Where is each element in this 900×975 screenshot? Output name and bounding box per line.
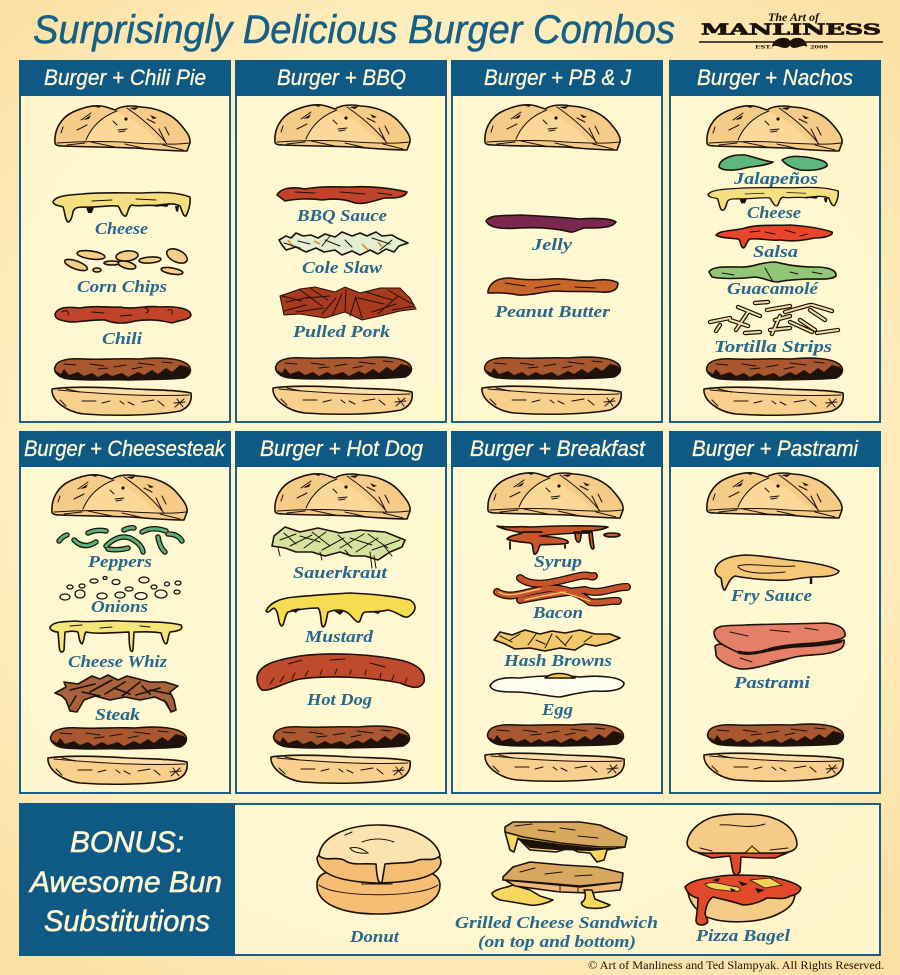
- logo: The Art of Manliness: 2009: [810, 44, 829, 50]
- peppers: [59, 528, 182, 552]
- label: hot dog: Hot Dog: [306, 690, 373, 709]
- bottom bun: [48, 756, 187, 784]
- logo: The Art of Manliness: [699, 10, 883, 50]
- label: chili: Chili: [102, 329, 142, 348]
- logo: The Art of Manliness: The Art of: [768, 10, 820, 24]
- peanut butter: [488, 278, 618, 295]
- label: peanut butter: Peanut Butter: [494, 302, 610, 321]
- top bun: [275, 104, 410, 150]
- copyright: © Art of Manliness and Ted Slampyak. All Rights Reserved.: [588, 960, 884, 972]
- header band: [235, 60, 447, 96]
- tortilla strips: [710, 302, 838, 334]
- top bun: [52, 474, 187, 520]
- label: pastrami: Pastrami: [733, 673, 810, 692]
- heading: Burger + Chili Pie: [44, 65, 206, 90]
- panel: Burger + PB & J: [451, 60, 663, 422]
- heading: Burger + Cheesesteak: [24, 436, 226, 461]
- label: steak: Steak: [95, 705, 141, 724]
- bottom bun: [271, 755, 410, 783]
- egg: [490, 674, 624, 697]
- header band: [669, 431, 881, 467]
- patty: [276, 357, 412, 379]
- chili: [55, 307, 191, 323]
- header band: [451, 431, 663, 467]
- cheese: [53, 192, 190, 222]
- hot dog: [257, 654, 424, 690]
- bottom bun: [482, 386, 621, 414]
- label: fry sauce: Fry Sauce: [730, 586, 813, 605]
- bottom bun: [704, 753, 843, 781]
- heading: Burger + Nachos: [697, 65, 853, 90]
- panel: bonus bun substitutions: [19, 803, 880, 956]
- bbq sauce: [277, 187, 407, 203]
- label: on top and bottom: (on top and bottom): [478, 932, 636, 951]
- label: cheese: Cheese: [95, 219, 148, 238]
- header band: [19, 431, 231, 467]
- label: sauerkraut: Sauerkraut: [293, 563, 388, 582]
- label: egg: Egg: [541, 700, 574, 719]
- panel: Burger + Breakfast: [451, 431, 663, 793]
- label: salsa: Salsa: [753, 242, 799, 261]
- label: cheese: Cheese: [747, 203, 801, 222]
- patty: [55, 358, 191, 380]
- panel: Burger + Chili Pie: [19, 60, 231, 422]
- label: jalapenos: Jalapeños: [733, 169, 818, 188]
- top bun: [485, 104, 620, 150]
- cheese whiz: [50, 621, 182, 652]
- label: syrup: Syrup: [534, 552, 582, 571]
- logo: The Art of Manliness: EST.: [755, 44, 772, 50]
- bottom bun: [704, 387, 843, 415]
- heading: Burger + PB & J: [484, 65, 632, 90]
- label: jelly: Jelly: [531, 235, 573, 254]
- label: guacamole: Guacamolé: [727, 279, 820, 298]
- panel: Burger + Nachos: [669, 60, 881, 422]
- label: bacon: Bacon: [532, 603, 583, 622]
- heading: Burger + Hot Dog: [260, 436, 424, 461]
- label: corn chips: Corn Chips: [77, 277, 167, 296]
- label: peppers: Peppers: [87, 552, 152, 571]
- panel: Burger + Hot Dog: [235, 431, 447, 793]
- pulled pork: [280, 287, 416, 320]
- salsa: [716, 225, 832, 248]
- patty: [485, 357, 621, 379]
- label: donut: Donut: [349, 927, 400, 946]
- bonus heading block: Substitutions: [44, 905, 210, 938]
- label: grilled cheese sandwich: Grilled Cheese Sandwich: [455, 913, 658, 932]
- grilled cheese sandwich: [492, 822, 627, 908]
- jelly: [486, 215, 616, 232]
- label: bbq sauce: BBQ Sauce: [296, 206, 387, 225]
- title: Surprisingly Delicious Burger Combos: [33, 8, 675, 52]
- top bun: [275, 473, 410, 519]
- label: tortilla strips: Tortilla Strips: [714, 337, 832, 356]
- bottom bun: [273, 386, 412, 414]
- patty: [274, 726, 410, 748]
- cheese: [708, 187, 838, 210]
- header band: [451, 60, 663, 96]
- patty: [51, 727, 187, 749]
- bonus heading block: [19, 803, 235, 956]
- top bun: [55, 105, 190, 151]
- label: pizza bagel: Pizza Bagel: [695, 926, 790, 945]
- bonus heading block: Awesome Bun: [28, 866, 222, 899]
- header band: [669, 60, 881, 96]
- sauerkraut: [272, 527, 405, 568]
- heading: Burger + Breakfast: [470, 436, 646, 461]
- bottom bun: [485, 753, 624, 781]
- top bun: [488, 472, 623, 518]
- pastrami: [714, 623, 845, 669]
- logo: The Art of Manliness: MANLINESS: [701, 20, 881, 38]
- syrup: [497, 526, 620, 554]
- cole slaw: [279, 232, 408, 255]
- corn chips: [63, 246, 190, 276]
- fry sauce: [715, 555, 839, 590]
- label: cheese whiz: Cheese Whiz: [68, 652, 167, 671]
- panel: Burger + Pastrami: [669, 431, 881, 793]
- pizza bagel: [685, 814, 801, 925]
- panel: Burger + Cheesesteak: [19, 431, 231, 793]
- label: onions: Onions: [91, 597, 148, 616]
- patty: [708, 724, 844, 746]
- panel: Burger + BBQ: [235, 60, 447, 422]
- heading: Burger + BBQ: [277, 65, 406, 90]
- label: pulled pork: Pulled Pork: [292, 322, 391, 341]
- bottom bun: [52, 387, 191, 415]
- top bun: [707, 472, 842, 518]
- jalapenos: [719, 155, 827, 170]
- onions: [60, 576, 181, 600]
- patty: [488, 724, 624, 746]
- patty: [707, 358, 843, 380]
- hash browns: [494, 630, 620, 651]
- steak: [55, 675, 178, 712]
- label: cole slaw: Cole Slaw: [302, 258, 383, 277]
- top bun: [707, 105, 842, 151]
- label: hash browns: Hash Browns: [503, 651, 612, 670]
- bacon: [497, 575, 627, 603]
- bonus heading block: BONUS:: [70, 826, 184, 859]
- label: mustard: Mustard: [304, 627, 374, 646]
- heading: Burger + Pastrami: [692, 436, 859, 461]
- donut: [317, 825, 441, 914]
- mustard: [266, 593, 415, 627]
- header band: [19, 60, 231, 96]
- guacamole: [709, 262, 836, 282]
- header band: [235, 431, 447, 467]
